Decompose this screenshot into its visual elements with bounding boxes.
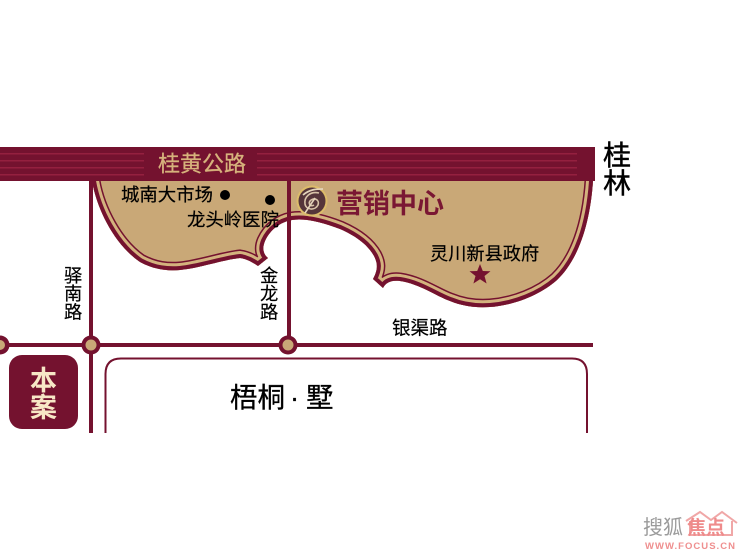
label: 桂林: 桂 [603, 140, 631, 171]
panel: 本案 badge: 案 [30, 393, 57, 423]
road: 驿南路 vertical line [89, 181, 93, 433]
label: 银渠路: 银渠路 [392, 318, 448, 338]
watermark: Sohu Focus logo: 焦点 [687, 517, 725, 539]
label: 桂黄公路: 桂黄公路 [158, 152, 246, 176]
label: 龙头岭医院: 龙头岭医院 [187, 209, 279, 230]
panel: tan district shape [93, 181, 593, 308]
watermark: Sohu Focus logo [643, 512, 737, 552]
label: 金龙路 [260, 265, 278, 322]
marker: 龙头岭医院 dot [265, 195, 275, 205]
label: 金龙路: 龙 [260, 283, 278, 304]
label: 梧桐·墅: 墅 [306, 382, 334, 413]
marker: left road junction [0, 336, 10, 354]
label: 驿南路: 路 [64, 302, 82, 322]
label: 金龙路: 金 [260, 265, 278, 286]
watermark: Sohu Focus logo: 搜狐 [643, 516, 683, 539]
label: 驿南路: 南 [64, 283, 82, 304]
label: 金龙路: 路 [260, 302, 278, 322]
label: 梧桐·墅 [230, 382, 334, 413]
watermark: Sohu Focus logo: WWW.FOCUS.CN [645, 541, 735, 552]
road: 银渠路 horizontal line [0, 343, 593, 347]
panel: 本案 badge: 本 [30, 366, 57, 396]
marker: 城南大市场 dot [220, 190, 230, 200]
icon: sales center logo [296, 186, 328, 216]
road: 金龙路 vertical line [287, 181, 291, 345]
label: 灵川新县政府: 灵川新县政府 [430, 244, 539, 264]
label: 驿南路: 驿 [64, 265, 82, 286]
panel: project plot outline [106, 358, 587, 433]
label: 桂林 [603, 140, 631, 199]
label: 驿南路 [64, 265, 82, 322]
panel: 本案 badge [9, 355, 78, 429]
label: 营销中心: 营销中心 [336, 189, 444, 219]
label: 桂林: 林 [603, 168, 631, 199]
icon: government star [470, 264, 490, 284]
label: 梧桐·墅: 梧桐· [230, 382, 299, 413]
label: 城南大市场: 城南大市场 [121, 184, 213, 205]
marker: 金龙路 junction [278, 336, 298, 354]
road: 桂黄公路 band [0, 147, 595, 181]
marker: 驿南路 junction [82, 336, 100, 354]
